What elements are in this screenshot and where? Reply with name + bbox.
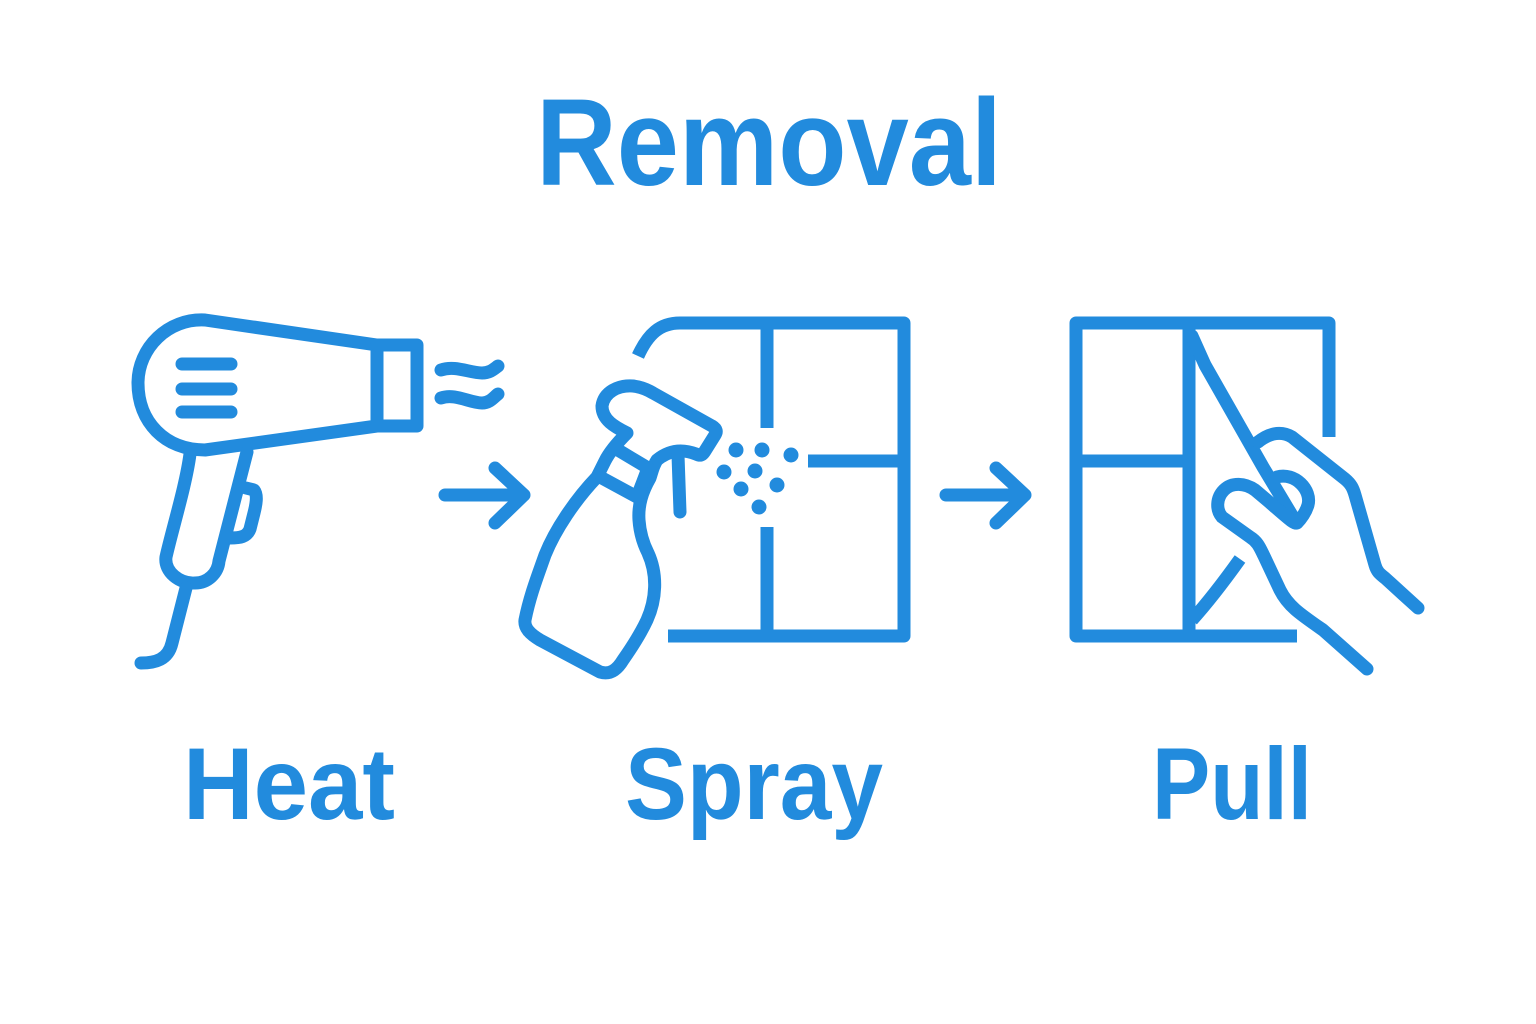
label: Heat: Heat — [183, 727, 395, 841]
spray droplets — [716, 442, 798, 514]
icon: window with peeling film and hand — [1076, 323, 1418, 669]
title: Removal — [536, 75, 1002, 212]
icon: hair dryer — [138, 320, 498, 663]
icon: window with spray bottle — [525, 323, 904, 673]
window frame — [1076, 323, 1329, 636]
arrow: spray to pull — [946, 468, 1025, 523]
label: Spray: Spray — [625, 727, 883, 841]
arrow: heat to spray — [445, 468, 524, 523]
spray bottle — [525, 386, 716, 673]
hand — [1258, 433, 1418, 608]
label: Pull: Pull — [1152, 727, 1312, 841]
peeled film — [1192, 336, 1293, 517]
window frame — [638, 323, 904, 636]
